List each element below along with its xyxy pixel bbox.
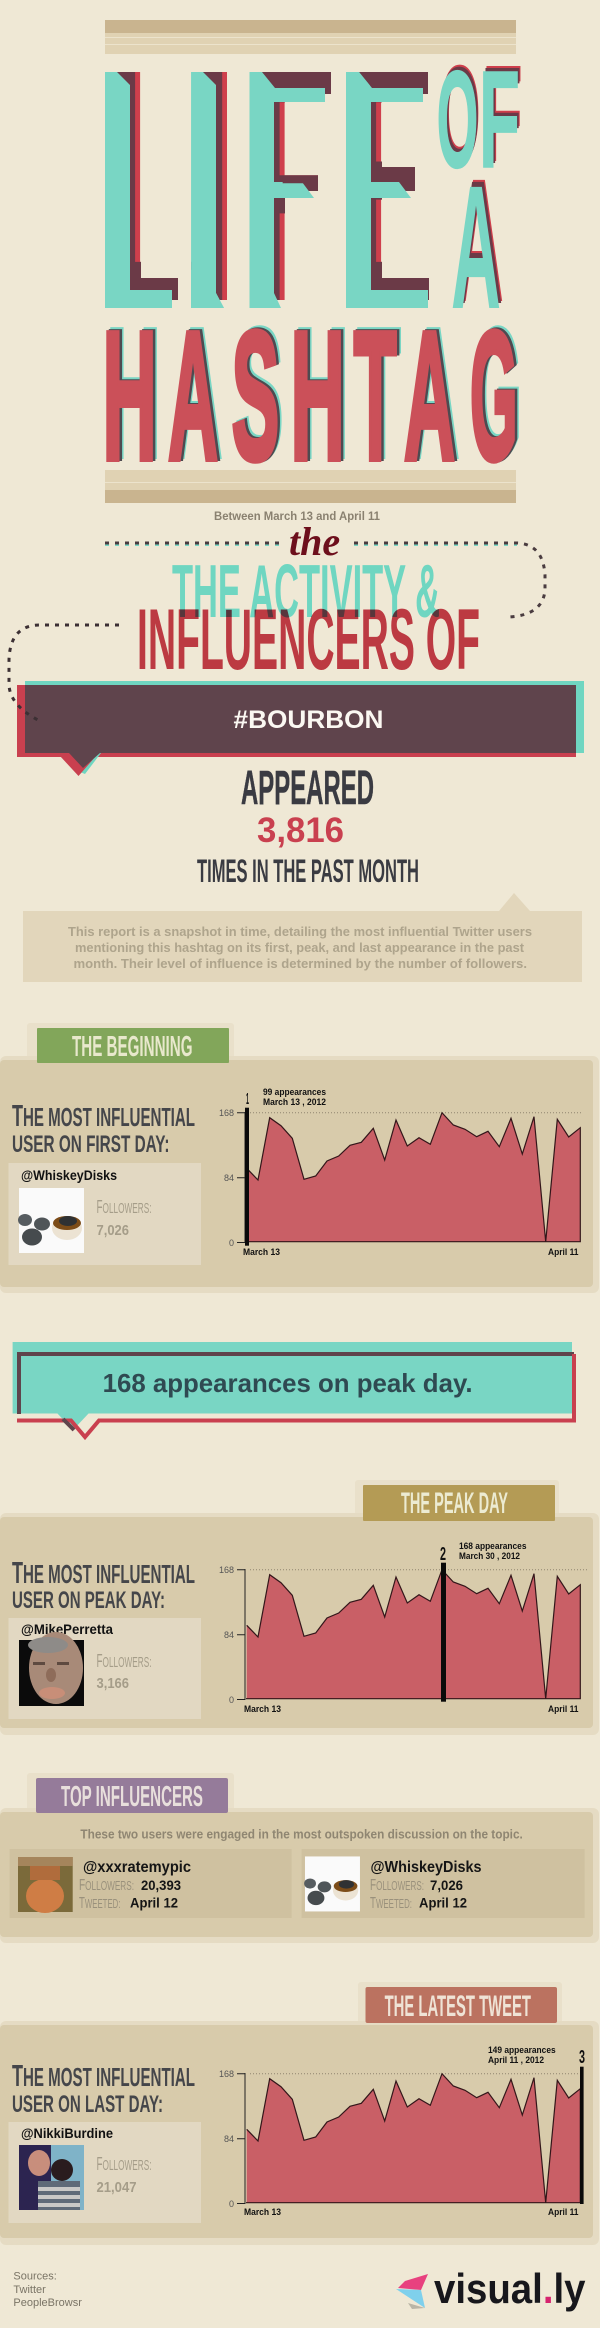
intro note box: month. Their level of influence is determined by the number of followers. [74,957,527,971]
influencer card: WhiskeyDisks: @WhiskeyDisks [370,1859,482,1876]
sources [13,2270,82,2309]
influencer card: xxxratemypic: 20,393 [141,1877,181,1893]
influencer card: xxxratemypic: @xxxratemypic [83,1859,191,1876]
chart: appearances, peak day marked: 168 [219,1565,234,1575]
tab: the latest tweet [366,1987,557,2023]
word: the: the [289,519,340,564]
title word: HASHTAG: H [106,290,161,495]
tab: top influencers: TOP INFLUENCERS [61,1781,203,1813]
stat: appeared 3,816 times: APPEARED [241,762,374,815]
user card: WhiskeyDisks: @WhiskeyDisks [21,1167,117,1183]
heading: most influential on last day: USER ON LAST DAY: [12,2091,163,2118]
user card: NikkiBurdine: FOLLOWERS: [96,2154,152,2174]
chart: appearances, first day marked: March 13 [243,1247,280,1258]
tab halo [27,1773,234,1818]
title word: OF: O [437,43,478,197]
title block: A [451,150,501,346]
title word: HASHTAG: H [294,290,349,495]
influencer card: xxxratemypic [10,1849,292,1918]
title word: LIFE: I [190,0,239,373]
chart: appearances, last day marked [219,2045,585,2218]
influencer card: WhiskeyDisks: 7,026 [430,1877,463,1893]
icon: whiskey stones photo [18,1188,84,1253]
sources: Sources: [13,2270,57,2282]
chart: appearances, first day marked: April 11 [548,1247,579,1258]
sources: PeopleBrowsr [13,2297,82,2309]
user card: WhiskeyDisks [8,1163,201,1265]
title word: OF: O [439,37,481,191]
section: top influencers [0,1773,599,1943]
chart: appearances, peak day marked: April 11 [548,1704,579,1715]
heading: the activity & influencers of [137,549,480,688]
chart: appearances, first day marked: 0 [229,1238,234,1248]
intro note box: mentioning this hashtag on its first, peak, and last appearance in the past [75,941,525,955]
tab: the beginning [37,1028,229,1063]
title word: LIFE: I [185,0,234,373]
title word: HASHTAG: H [290,293,345,498]
chart: appearances, peak day marked: 0 [229,1695,234,1705]
influencer card: WhiskeyDisks: FOLLOWERS: [370,1877,424,1894]
chart: appearances, last day marked: 168 [219,2069,234,2079]
chart: appearances, last day marked: 0 [229,2199,234,2209]
influencer card: xxxratemypic: FOLLOWERS: [79,1877,134,1894]
title block: A [454,143,504,339]
heading: most influential on peak day: USER ON PEAK DAY: [12,1587,165,1614]
banner: #BOURBON [17,681,584,776]
chart: appearances, first day marked: 99 appearances [263,1087,326,1098]
panel background [0,1056,599,1293]
text: F [481,39,522,193]
section: the beginning [0,1023,599,1293]
title word: HASHTAG: S [234,292,282,497]
influencer card: WhiskeyDisks: TWEETED: [370,1895,412,1912]
tab: the beginning: THE BEGINNING [72,1031,192,1063]
bottom stripe band [105,470,516,503]
title word: LIFE: L [88,0,234,381]
panel background [0,2021,599,2245]
panel background [0,1513,599,1735]
user card: MikePerretta: 3,166 [96,1675,129,1692]
chart: appearances, peak day marked: 2 [440,1544,446,1564]
chart: appearances, last day marked: 3 [579,2047,585,2067]
chart: appearances, peak day marked: March 13 [244,1704,281,1715]
chart: appearances, first day marked: 1 [246,1091,249,1108]
chart: appearances, first day marked: 168 [219,1108,234,1118]
panel background [0,1808,599,1943]
stat: appeared 3,816 times [197,762,419,889]
banner: #BOURBON: #BOURBON [234,706,384,734]
tab: the peak day [363,1485,555,1521]
title word: LIFE: F [243,0,350,373]
chart: appearances, peak day marked: 168 appearances [459,1541,526,1552]
user card: WhiskeyDisks: FOLLOWERS: [96,1197,152,1217]
sources: Twitter [13,2284,46,2296]
callout: 168 appearances on peak day [13,1342,574,1437]
title word: LIFE [105,72,429,308]
section: the peak day [0,1480,599,1735]
icon: portrait photo [19,2145,84,2210]
heading: most influential on peak day [12,1555,195,1614]
chart: appearances, last day marked: March 13 [244,2207,281,2218]
title word: LIFE: F [232,0,379,381]
text: F [482,37,523,191]
title word: HASHTAG: A [408,290,459,495]
chart: appearances, peak day marked: 84 [224,1630,234,1640]
title word: HASHTAG: A [404,293,455,498]
title word: LIFE: E [328,0,488,381]
tab halo [358,1982,562,2028]
chart: appearances, last day marked: April 11 [548,2207,579,2218]
title word: LIFE: F [248,0,355,373]
title word: HASHTAG: T [354,293,397,498]
intro note box [23,893,582,982]
influencer card: xxxratemypic: April 12 [130,1894,178,1910]
chart: appearances, last day marked: 149 appearances [488,2045,556,2056]
chart: appearances, first day marked: 84 [224,1173,234,1183]
dotted connector into banner [9,625,119,720]
title word: HASHTAG: H [105,292,159,497]
user card: MikePerretta: FOLLOWERS: [96,1651,152,1671]
section: the latest tweet [0,1982,599,2245]
tab: top influencers [36,1778,228,1813]
title word: HASHTAG: T [356,292,399,497]
heading: most influential on peak day: THE MOST INFLUENTIAL [12,1555,195,1590]
title word: OF: O [438,39,480,193]
icon: portrait photo [19,1632,84,1706]
description text: These two users were engaged in the most outspoken discussion on the topic. [80,1826,523,1842]
chart: appearances, peak day marked: March 30 , 2012 [459,1551,520,1562]
icon: whiskey stones photo [304,1856,360,1911]
chart: appearances, peak day marked [219,1541,588,1715]
icon: profile photo [18,1857,73,1913]
tab halo [27,1023,234,1068]
stat: appeared 3,816 times: 3,816 [257,811,344,850]
icon: gem [396,2274,428,2309]
title word: LIFE: E [339,0,456,373]
heading: most influential on last day [12,2058,195,2118]
title word: OF: F [479,43,520,197]
user card: NikkiBurdine: 21,047 [96,2179,136,2196]
title word: LIFE: L [103,0,210,373]
title word: HASHTAG: A [168,293,218,498]
title block: A [453,145,503,341]
title word: HASHTAG: H [102,293,157,498]
title word: HASHTAG: T [358,290,401,495]
title word: LIFE: I [175,0,242,381]
heading: most influential on first day [12,1098,195,1158]
user card: MikePerretta: @MikePerretta [21,1621,113,1637]
user card: WhiskeyDisks: 7,026 [96,1222,129,1239]
chart: appearances, first day marked [219,1087,581,1258]
intro note box: This report is a snapshot in time, detailing the most influential Twitter users [68,925,532,939]
title word: HASHTAG: S [236,290,283,495]
title word: HASHTAG: S [232,293,279,498]
heading: most influential on first day: THE MOST INFLUENTIAL [12,1098,195,1133]
title word: A [451,143,504,346]
influencer card: xxxratemypic: TWEETED: [79,1895,120,1912]
dotted connector lines [105,543,545,617]
chart: appearances, first day marked: March 13 , 2012 [263,1097,326,1108]
heading: most influential on first day: USER ON FIRST DAY: [12,1131,170,1158]
influencer card: WhiskeyDisks [302,1849,585,1918]
title word: HASHTAG: A [170,292,220,497]
user card: NikkiBurdine [8,2122,201,2223]
callout: 168 appearances on peak day: 168 appearances on peak day. [103,1368,473,1398]
chart: appearances, last day marked: April 11 , 2012 [488,2055,544,2066]
title word: HASHTAG: A [172,290,222,495]
chart: appearances, last day marked: 84 [224,2134,234,2144]
title word: LIFE: L [98,0,205,373]
title word: HASHTAG [102,290,522,498]
logo: visual.ly: visual.ly [434,2265,586,2312]
heading: most influential on last day: THE MOST INFLUENTIAL [12,2058,195,2093]
title block [88,0,523,503]
tab halo [355,1480,559,1526]
user card: NikkiBurdine: @NikkiBurdine [21,2125,113,2141]
user card: MikePerretta [8,1618,201,1719]
influencer card: WhiskeyDisks: April 12 [419,1894,467,1910]
top stripe band [105,20,516,54]
title word: HASHTAG: H [293,292,347,497]
title word: HASHTAG: A [406,292,458,497]
title word: LIFE: E [344,0,461,373]
date range: Between March 13 and April 11 [214,509,380,523]
